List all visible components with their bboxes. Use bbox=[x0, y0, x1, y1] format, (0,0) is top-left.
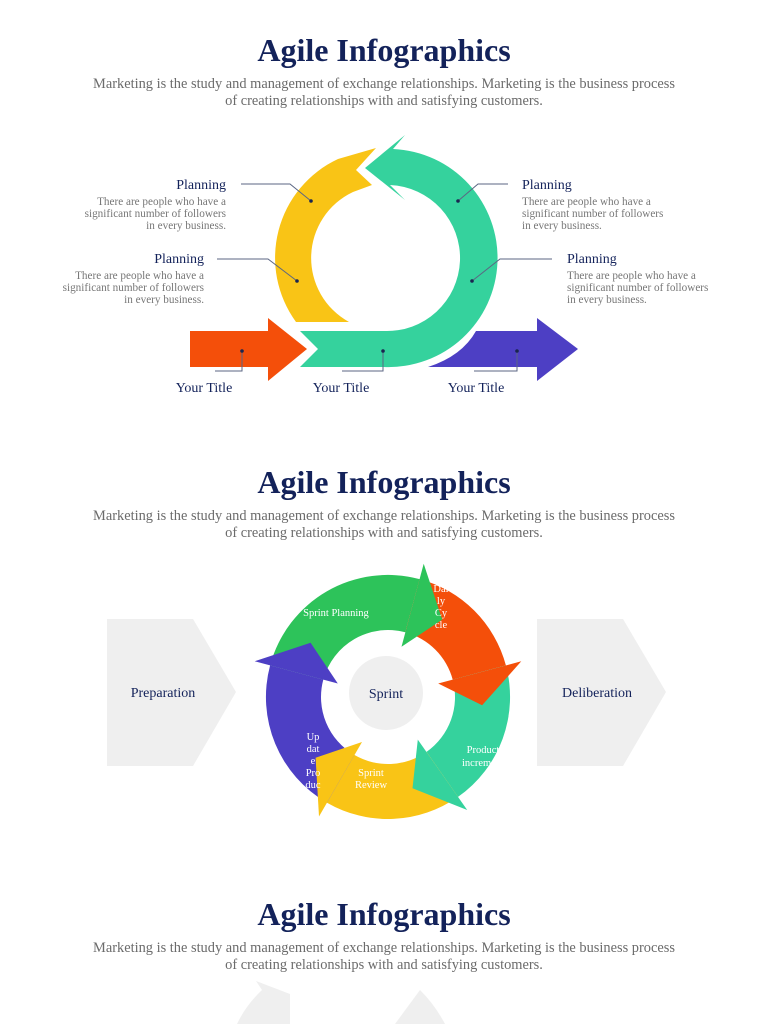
arrow: purple bbox=[428, 318, 578, 381]
segment labels: Dai bbox=[433, 584, 449, 595]
segment labels: Cy bbox=[435, 608, 448, 619]
subtitle 1: Marketing is the study and management of exchange relationships. Marketing is the business process bbox=[93, 76, 675, 92]
label: planning right top: Planning bbox=[522, 178, 572, 193]
panel: deliberation bbox=[537, 619, 666, 766]
label: planning right bottom: in every business. bbox=[567, 294, 647, 306]
subtitle 3 bbox=[93, 940, 675, 973]
center: sprint bbox=[349, 656, 423, 730]
label: planning right top: There are people who have a bbox=[522, 196, 651, 208]
section 1 bbox=[63, 32, 708, 396]
labels: your title: Your Title bbox=[448, 381, 504, 396]
subtitle 2: Marketing is the study and management of exchange relationships. Marketing is the business process bbox=[93, 508, 675, 524]
label: planning left bottom bbox=[63, 252, 204, 306]
label: planning left top: significant number of followers bbox=[85, 208, 226, 220]
title 3: Agile Infographics bbox=[257, 896, 511, 932]
section 3 bbox=[93, 896, 675, 1024]
label: planning left top: in every business. bbox=[146, 220, 226, 232]
center: sprint: Sprint bbox=[369, 687, 403, 702]
labels: your title bbox=[176, 381, 504, 396]
segment labels: ly bbox=[437, 596, 446, 607]
label: planning right bottom: significant number of followers bbox=[567, 282, 708, 294]
subtitle 2: of creating relationships with and satisfying customers. bbox=[225, 525, 543, 541]
subtitle 2 bbox=[93, 508, 675, 541]
segment labels: Product bbox=[467, 745, 499, 756]
arrow: orange bbox=[190, 318, 307, 381]
segment labels: Review bbox=[355, 780, 387, 791]
label: planning left bottom: significant number of followers bbox=[63, 282, 204, 294]
label: planning left bottom: in every business. bbox=[124, 294, 204, 306]
segment labels: Sprint bbox=[358, 768, 384, 779]
labels: your title: Your Title bbox=[313, 381, 369, 396]
arrow: yellow arc bbox=[275, 148, 376, 322]
subtitle 1 bbox=[93, 76, 675, 109]
section 2 bbox=[93, 464, 675, 819]
segment labels: Pro bbox=[306, 768, 320, 779]
label: planning left bottom: Planning bbox=[154, 252, 204, 267]
label: planning right bottom: Planning bbox=[567, 252, 617, 267]
segment labels: Sprint Planning bbox=[303, 608, 370, 619]
segment labels: dat bbox=[307, 744, 319, 755]
label: planning right top: in every business. bbox=[522, 220, 602, 232]
label: planning right bottom: There are people who have a bbox=[567, 270, 696, 282]
label: planning right bottom bbox=[567, 252, 708, 306]
segment labels: e bbox=[311, 756, 316, 767]
labels: your title: Your Title bbox=[176, 381, 232, 396]
segment labels: cle bbox=[435, 620, 447, 631]
panel: deliberation: Deliberation bbox=[562, 686, 632, 701]
segment labels: Up bbox=[307, 732, 319, 743]
label: planning left top: Planning bbox=[176, 178, 226, 193]
label: planning right top: significant number of followers bbox=[522, 208, 663, 220]
leader lines bbox=[215, 184, 552, 371]
segment labels: duc bbox=[305, 780, 321, 791]
subtitle 3: of creating relationships with and satisfying customers. bbox=[225, 957, 543, 973]
arrow: green loop bbox=[300, 135, 498, 367]
title 2: Agile Infographics bbox=[257, 464, 511, 500]
gray arrow shapes bbox=[237, 981, 445, 1024]
label: planning left bottom: There are people who have a bbox=[75, 270, 204, 282]
segment labels bbox=[303, 584, 504, 791]
panel: preparation: Preparation bbox=[131, 686, 195, 701]
panel: preparation bbox=[107, 619, 236, 766]
subtitle 3: Marketing is the study and management of exchange relationships. Marketing is the business process bbox=[93, 940, 675, 956]
subtitle 1: of creating relationships with and satisfying customers. bbox=[225, 93, 543, 109]
segment labels: increment bbox=[462, 758, 504, 769]
label: planning left top bbox=[85, 178, 226, 232]
label: planning right top bbox=[522, 178, 663, 232]
title 1: Agile Infographics bbox=[257, 32, 511, 68]
cycle ring bbox=[255, 564, 521, 819]
label: planning left top: There are people who have a bbox=[97, 196, 226, 208]
